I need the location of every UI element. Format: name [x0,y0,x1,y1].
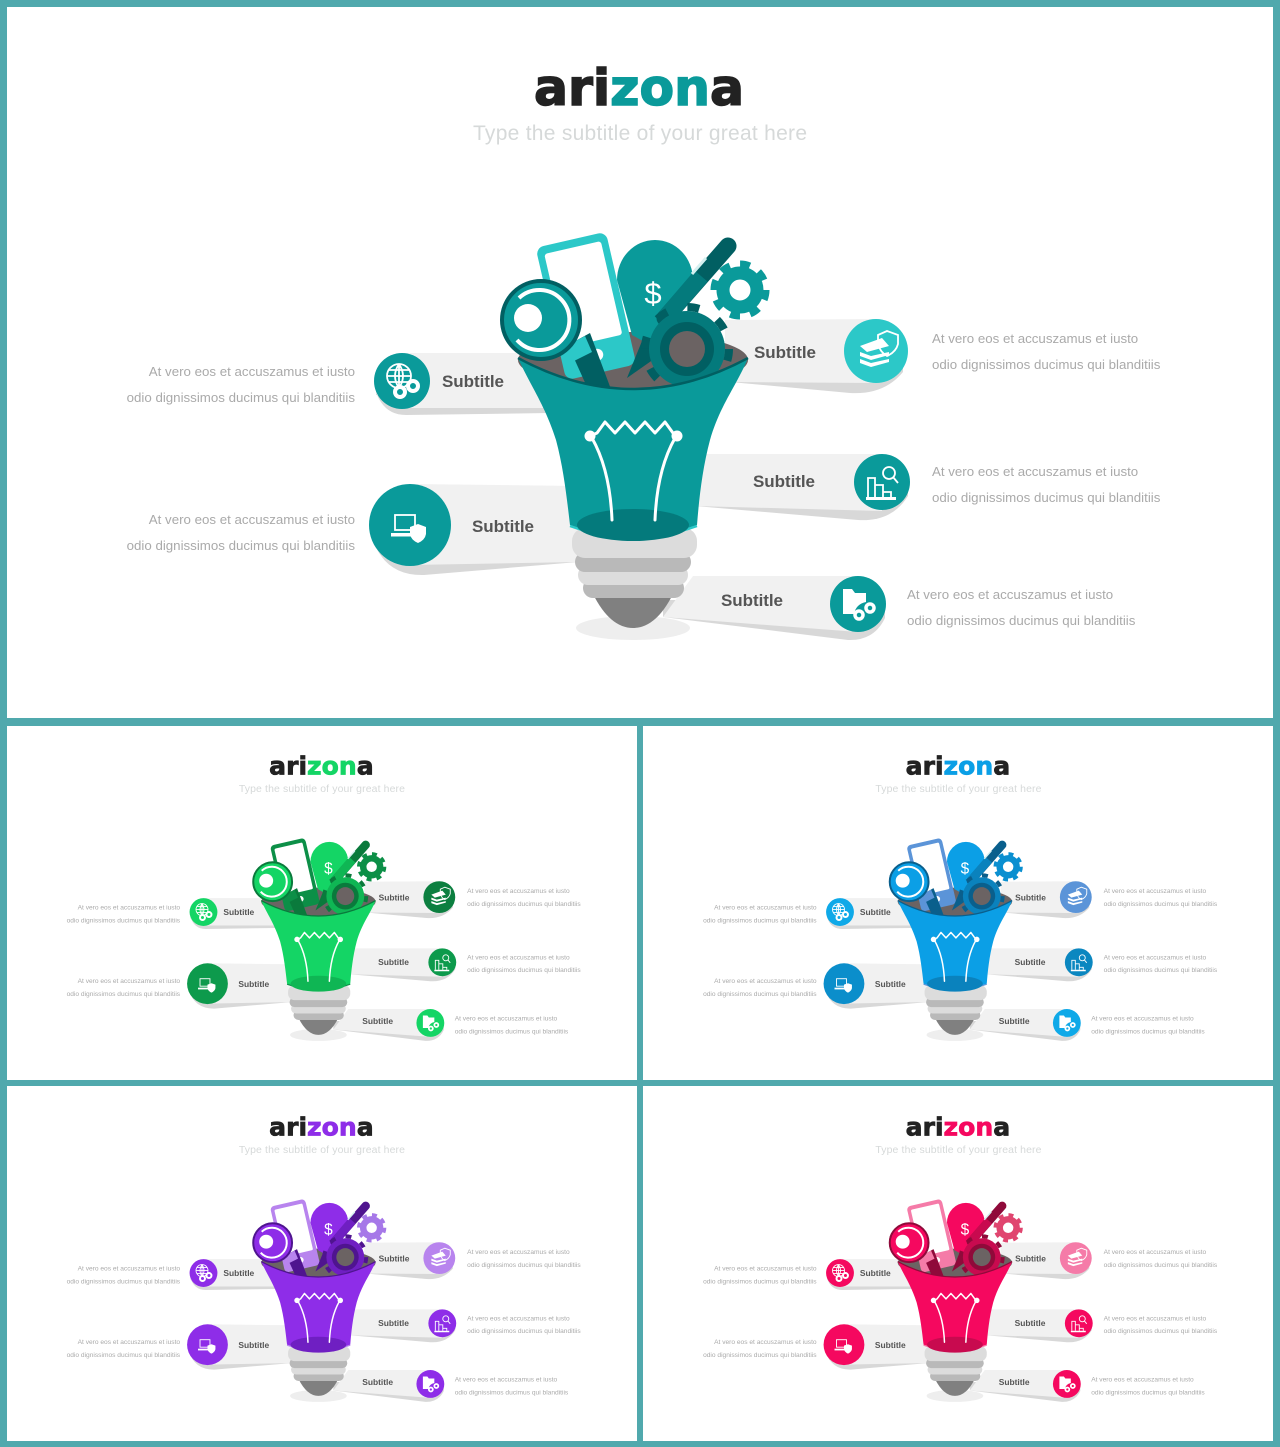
callout: left top: Subtitle [860,1268,891,1278]
callout: left top: At vero eos et accuszamus et iusto [78,1266,180,1273]
callout: right middle: Subtitle [378,957,409,967]
callout: left bottom: At vero eos et accuszamus et iusto [714,978,817,985]
callout: right middle [1015,1309,1218,1337]
callout: right top: Subtitle [379,893,410,903]
callout: left bottom [67,963,269,1004]
callout: right top [754,319,1161,383]
callout: right bottom: Subtitle [362,1377,393,1387]
callout: left bottom: odio dignissimos ducimus qui blanditiis [703,991,817,998]
callout: right bottom: At vero eos et accuszamus et iusto [1091,1016,1194,1023]
callout: left bottom: odio dignissimos ducimus qui blanditiis [127,538,355,553]
callout: left bottom: odio dignissimos ducimus qui blanditiis [703,1352,817,1359]
callout: left top: Subtitle [223,907,255,917]
subtitle: Type the subtitle of your great here [473,122,807,145]
callout: left bottom: At vero eos et accuszamus et iusto [78,1339,180,1346]
callout: right bottom: odio dignissimos ducimus qui blanditiis [1091,1389,1205,1396]
callout: left bottom: Subtitle [875,1340,906,1350]
callout: right top: At vero eos et accuszamus et iusto [932,331,1138,346]
callout: right bottom: At vero eos et accuszamus et iusto [1091,1377,1194,1384]
callout: right top: odio dignissimos ducimus qui blanditiis [1104,1262,1218,1269]
callout: left top: Subtitle [223,1268,255,1278]
callout: right bottom [362,1370,569,1398]
panel: main teal slide [7,7,1273,718]
subtitle: Type the subtitle of your great here [875,1145,1042,1156]
callout: right top: At vero eos et accuszamus et iusto [1104,1249,1206,1256]
light bulb illustration [502,232,766,640]
pill bands [825,1242,1092,1402]
pill bands [372,319,908,640]
callout: left top: Subtitle [442,372,504,391]
callout: right bottom: At vero eos et accuszamus et iusto [455,1377,558,1384]
light bulb illustration [890,1199,1021,1402]
callout: right top [1015,1242,1218,1274]
callout: right middle [1015,948,1218,976]
callout: left top [703,1259,891,1287]
callout: right middle: At vero eos et accuszamus et iusto [467,954,570,961]
callout: left top: odio dignissimos ducimus qui blanditiis [703,1278,817,1285]
callout: right middle: Subtitle [1015,957,1046,967]
callout: right middle: odio dignissimos ducimus qui blanditiis [467,967,581,974]
callout: left bottom: At vero eos et accuszamus et iusto [149,512,355,527]
callout: right middle [378,1309,581,1337]
callout: right top: Subtitle [1015,893,1046,903]
callout: left top: odio dignissimos ducimus qui blanditiis [127,390,355,405]
light bulb illustration [253,838,385,1041]
callout: right top: odio dignissimos ducimus qui blanditiis [467,1262,581,1269]
callout: right top: Subtitle [1015,1254,1046,1264]
title: arizona [906,1113,1010,1142]
callout: right bottom [999,1009,1205,1037]
callout: left top [67,898,255,926]
callout: right middle: odio dignissimos ducimus qui blanditiis [1104,1328,1218,1335]
pill bands [189,1242,455,1402]
callout: right bottom: At vero eos et accuszamus et iusto [907,587,1113,602]
callout: right middle: Subtitle [1015,1318,1046,1328]
callout: right bottom [721,576,1136,632]
callout: right top: At vero eos et accuszamus et iusto [467,1249,570,1256]
callout: right middle: At vero eos et accuszamus et iusto [932,464,1138,479]
callout: left top: odio dignissimos ducimus qui blanditiis [67,917,181,924]
callout: right middle: At vero eos et accuszamus et iusto [1104,954,1206,961]
title: arizona [534,59,744,117]
callout: right bottom: Subtitle [721,591,783,610]
light bulb illustration [890,838,1021,1041]
callout: left bottom [703,1324,906,1365]
callout: right top: At vero eos et accuszamus et iusto [1104,888,1206,895]
callout: right top [379,881,581,913]
title: arizona [906,752,1010,781]
callout: left top: odio dignissimos ducimus qui blanditiis [67,1278,181,1285]
callout: left top: odio dignissimos ducimus qui blanditiis [703,917,817,924]
subtitle: Type the subtitle of your great here [875,784,1042,795]
callout: right middle: At vero eos et accuszamus et iusto [1104,1315,1206,1322]
callout: left bottom: Subtitle [238,1340,269,1350]
panel: blue slide [643,726,1273,1080]
callout: right middle: odio dignissimos ducimus qui blanditiis [1104,967,1218,974]
callout: right bottom: odio dignissimos ducimus qui blanditiis [1091,1028,1205,1035]
callout: left bottom: Subtitle [238,979,269,989]
callout: right bottom: odio dignissimos ducimus qui blanditiis [455,1389,569,1396]
light bulb illustration [253,1199,385,1402]
callout: right middle: odio dignissimos ducimus qui blanditiis [467,1328,581,1335]
callout: left bottom [127,484,534,566]
callout: right top: odio dignissimos ducimus qui blanditiis [932,357,1161,372]
callout: right bottom: Subtitle [362,1016,393,1026]
callout: right bottom: odio dignissimos ducimus qui blanditiis [907,613,1136,628]
callout: right top [379,1242,581,1274]
pill bands [189,881,455,1041]
callout: right top: Subtitle [754,343,816,362]
callout: right top: At vero eos et accuszamus et iusto [467,888,570,895]
title: arizona [269,752,374,781]
subtitle: Type the subtitle of your great here [239,784,405,795]
callout: left top: At vero eos et accuszamus et iusto [78,905,180,912]
panel: purple slide [7,1086,637,1441]
callout: right top: odio dignissimos ducimus qui blanditiis [1104,901,1218,908]
callout: left top [127,353,504,409]
callout: right bottom: At vero eos et accuszamus et iusto [455,1016,558,1023]
callout: right middle [378,948,581,976]
callout: left bottom: Subtitle [472,517,534,536]
callout: right bottom: Subtitle [999,1377,1030,1387]
callout: right middle: At vero eos et accuszamus et iusto [467,1315,570,1322]
subtitle: Type the subtitle of your great here [239,1145,405,1156]
callout: left top: At vero eos et accuszamus et iusto [714,1266,817,1273]
callout: right middle: Subtitle [378,1318,409,1328]
callout: left bottom: At vero eos et accuszamus et iusto [78,978,180,985]
callout: right bottom: odio dignissimos ducimus qui blanditiis [455,1028,569,1035]
callout: left top [703,898,891,926]
callout: left top [67,1259,255,1287]
callout: left bottom: odio dignissimos ducimus qui blanditiis [67,1352,181,1359]
callout: left bottom: odio dignissimos ducimus qui blanditiis [67,991,181,998]
callout: left top: At vero eos et accuszamus et iusto [149,364,355,379]
panel: pink slide [643,1086,1273,1441]
callout: left bottom [703,963,906,1004]
callout: right middle: Subtitle [753,472,815,491]
callout: left bottom [67,1324,269,1365]
callout: right bottom [362,1009,569,1037]
callout: right top [1015,881,1218,913]
callout: right top: Subtitle [379,1254,410,1264]
callout: right bottom: Subtitle [999,1016,1030,1026]
callout: left top: Subtitle [860,907,891,917]
panel: green slide [7,726,637,1080]
callout: right top: odio dignissimos ducimus qui blanditiis [467,901,581,908]
title: arizona [269,1113,374,1142]
callout: right middle: odio dignissimos ducimus qui blanditiis [932,490,1161,505]
pill bands [825,881,1092,1041]
callout: left bottom: Subtitle [875,979,906,989]
callout: right middle [753,454,1161,510]
callout: left top: At vero eos et accuszamus et iusto [714,905,817,912]
callout: left bottom: At vero eos et accuszamus et iusto [714,1339,817,1346]
callout: right bottom [999,1370,1205,1398]
